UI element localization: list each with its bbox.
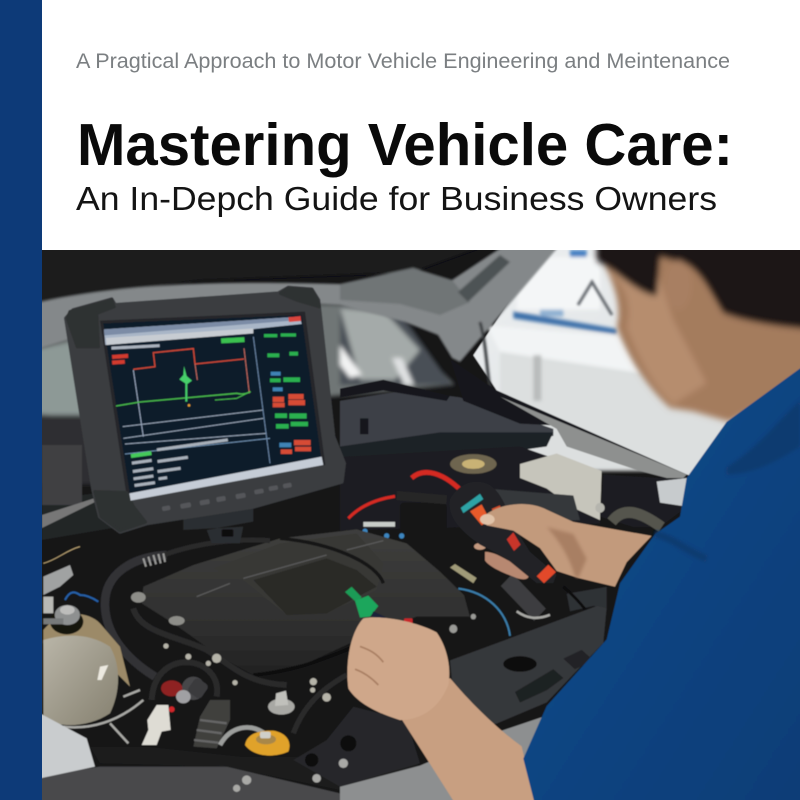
ear [665,261,692,310]
workshop background [472,250,742,476]
cover recess [515,669,563,703]
side status chips red [273,394,311,454]
wiring near meter [348,472,466,541]
corrugated boot [193,700,230,748]
handheld meter [449,482,557,583]
hose clips [131,592,185,625]
side status chips blue [271,372,291,447]
diagnostic tablet [66,288,344,532]
subtitle: An In-Depch Guide for Business Owners [76,180,717,217]
waveform chart [116,337,270,463]
chart heading bar [111,344,160,350]
cover vent [563,650,593,669]
small parts [449,614,476,633]
chrome trim [340,717,543,800]
right plastic cover [340,564,607,800]
blue wire [65,592,98,602]
chart marker [188,404,190,407]
engine cover [142,529,470,675]
neck and face [597,229,800,422]
shirt shoulder shade [727,401,800,475]
rear engine bay components [340,446,687,531]
cover slot [503,656,537,672]
coolant reservoir [43,636,118,725]
reservoir highlight [97,665,108,680]
finger shadows [355,646,383,685]
black hoses [105,540,347,733]
right hand fingers [474,543,529,579]
round ports [305,735,356,767]
strut tower [43,605,130,687]
corner bumpers [67,288,319,531]
left cowl [42,445,112,540]
navy side bar [0,0,42,800]
metal lines [63,690,143,743]
tablet mount [183,507,253,543]
front radiator support and bumper [30,707,420,800]
meter red end cap [537,565,556,583]
hair [597,229,800,331]
thumb tip [480,514,495,525]
main title: Mastering Vehicle Care: [77,112,733,178]
metal pipe [220,727,267,745]
meter red key [507,532,521,551]
red chart labels [112,354,128,365]
white panel left [40,713,95,778]
sleeve fold [655,534,707,559]
red probe clip [404,618,413,626]
left forearm and hand [345,587,537,800]
screen [103,315,322,495]
photo: mechanic diagnosing an engine [30,229,800,800]
meter orange button [470,504,490,525]
engine bay left details [43,540,347,756]
rugged case [66,288,344,532]
meter body [449,482,557,583]
cable [563,587,603,638]
blue work shirt [523,359,800,800]
cowl and fender [339,379,687,479]
support bolts [233,759,348,792]
windshield [30,300,455,485]
knuckle shadow [547,527,587,578]
small bolts [163,643,331,702]
mechanic head [597,229,800,422]
header background [42,0,800,250]
engine parts behind cover [450,564,607,636]
meter orange key [492,505,502,514]
header text [76,50,733,217]
forearm [400,678,537,800]
case inner edge [100,312,325,501]
red throttle part [161,677,209,712]
bracket upper left [43,565,73,595]
right hand and arm [480,504,652,587]
silver bolt fitting [268,691,295,715]
side status chips green [264,333,308,429]
hose spring [143,553,165,567]
port block [293,707,420,787]
hardware buttons [162,482,292,511]
open hood underside [42,250,558,386]
white connector [142,705,171,745]
wall cabinet [486,250,646,474]
hand [347,617,449,720]
glasses arm [578,282,612,315]
chart spike [179,366,192,402]
readout top [221,337,245,343]
probe tip [345,587,391,625]
meter display [461,494,483,513]
yellow oil cap [245,731,290,756]
cover body [450,606,607,731]
title bar [104,317,302,345]
eyebrow line: A Pragtical Approach to Motor Vehicle Engineering and Meintenance [76,50,730,73]
status bar bottom [129,457,323,501]
lower data table [131,438,228,487]
lower grey strip [30,767,347,800]
black cross member [90,747,420,790]
